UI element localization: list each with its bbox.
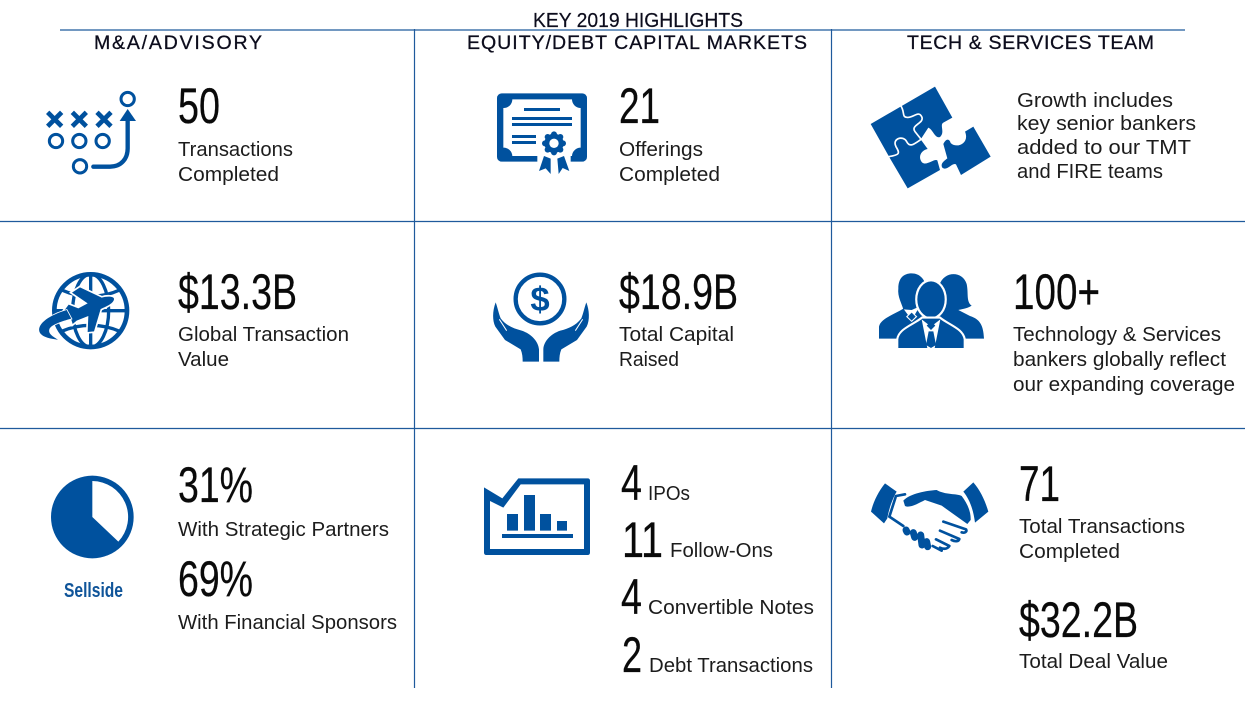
icon: playbook: [48, 92, 136, 173]
text block: growth: added to our TMT: [1017, 136, 1192, 159]
icon: pie chart: [51, 476, 134, 558]
icon: globe with airplane: [39, 274, 127, 347]
text block: growth: Growth includes: [1017, 89, 1173, 112]
stat: 4 IPOs: [621, 455, 690, 511]
icon: bar chart: [484, 478, 590, 555]
text block: growth: key senior bankers: [1017, 112, 1196, 135]
stat: 4 IPOs: IPOs: [648, 482, 690, 505]
stat: 69% with financial sponsors: [178, 551, 397, 634]
stat: 11 follow-ons: Follow-Ons: [670, 539, 773, 562]
stat: 69% with financial sponsors: 69%: [178, 551, 253, 607]
stat: 50 transactions completed: Completed: [178, 163, 279, 186]
stat: 100+ technology and services bankers: our expanding coverage: [1013, 373, 1235, 396]
text block: growth: [1017, 89, 1196, 183]
stat: 50 transactions completed: Transactions: [178, 138, 293, 161]
stat: 71 total transactions completed: [1019, 456, 1185, 563]
stat: 21 offerings completed: 21: [619, 78, 660, 134]
stat: 2 debt transactions: [622, 627, 813, 683]
stat: 71 total transactions completed: 71: [1019, 456, 1060, 512]
stat: $32.2B total deal value: [1019, 592, 1168, 673]
stat: $18.9B total capital raised: [619, 264, 738, 371]
stat: $32.2B total deal value: $32.2B: [1019, 592, 1138, 648]
stat: 4 convertible notes: 4: [621, 569, 642, 625]
stat: 100+ technology and services bankers: bankers globally reflect: [1013, 348, 1226, 371]
icon: hands holding coin: $: [530, 281, 550, 319]
heading: Tech & Services Team: TECH & SERVICES TEAM: [907, 32, 1154, 54]
stat: $13.3B global transaction value: Global Transaction: [178, 323, 349, 346]
stat: $18.9B total capital raised: Raised: [619, 348, 679, 371]
icon: puzzle: [871, 87, 991, 188]
stat: 31% with strategic partners: [178, 457, 389, 541]
stat: 2 debt transactions: Debt Transactions: [649, 654, 813, 677]
stat: $32.2B total deal value: Total Deal Value: [1019, 650, 1168, 673]
stat: 21 offerings completed: Offerings: [619, 138, 703, 161]
stat: 31% with strategic partners: 31%: [178, 457, 253, 513]
stat: 4 convertible notes: [621, 569, 814, 625]
heading: M&A/Advisory: M&A/ADVISORY: [94, 32, 262, 54]
icon: handshake: [871, 482, 988, 551]
stat: $13.3B global transaction value: [178, 264, 349, 371]
stat: 2 debt transactions: 2: [622, 627, 642, 683]
stat: $13.3B global transaction value: Value: [178, 348, 229, 371]
stat: 21 offerings completed: Completed: [619, 163, 720, 186]
stat: 100+ technology and services bankers: Technology & Services: [1013, 323, 1221, 346]
stat: 69% with financial sponsors: With Financial Sponsors: [178, 611, 397, 634]
text block: growth: and FIRE teams: [1017, 160, 1163, 183]
stat: 4 IPOs: 4: [621, 455, 642, 511]
icon: hands holding coin: [493, 275, 589, 362]
stat: $18.9B total capital raised: Total Capital: [619, 323, 734, 346]
stat: 50 transactions completed: [178, 78, 293, 186]
label: Sellside: Sellside: [64, 580, 123, 602]
stat: 11 follow-ons: [622, 512, 773, 568]
stat: 4 convertible notes: Convertible Notes: [648, 596, 814, 619]
stat: 50 transactions completed: 50: [178, 78, 220, 134]
stat: 21 offerings completed: [619, 78, 720, 186]
icon: certificate: [497, 93, 587, 174]
stat: 11 follow-ons: 11: [622, 512, 663, 568]
stat: 71 total transactions completed: Completed: [1019, 540, 1120, 563]
stat: 100+ technology and services bankers: 100+: [1013, 264, 1100, 320]
stat: 71 total transactions completed: Total Transactions: [1019, 515, 1185, 538]
stat: 31% with strategic partners: With Strategic Partners: [178, 518, 389, 541]
stat: $13.3B global transaction value: $13.3B: [178, 264, 297, 320]
heading: Equity/Debt Capital Markets: EQUITY/DEBT CAPITAL MARKETS: [467, 32, 807, 54]
stat: $18.9B total capital raised: $18.9B: [619, 264, 738, 320]
title: KEY 2019 HIGHLIGHTS: [533, 10, 743, 32]
icon: business people: [879, 273, 984, 348]
stat: 100+ technology and services bankers: [1013, 264, 1235, 396]
